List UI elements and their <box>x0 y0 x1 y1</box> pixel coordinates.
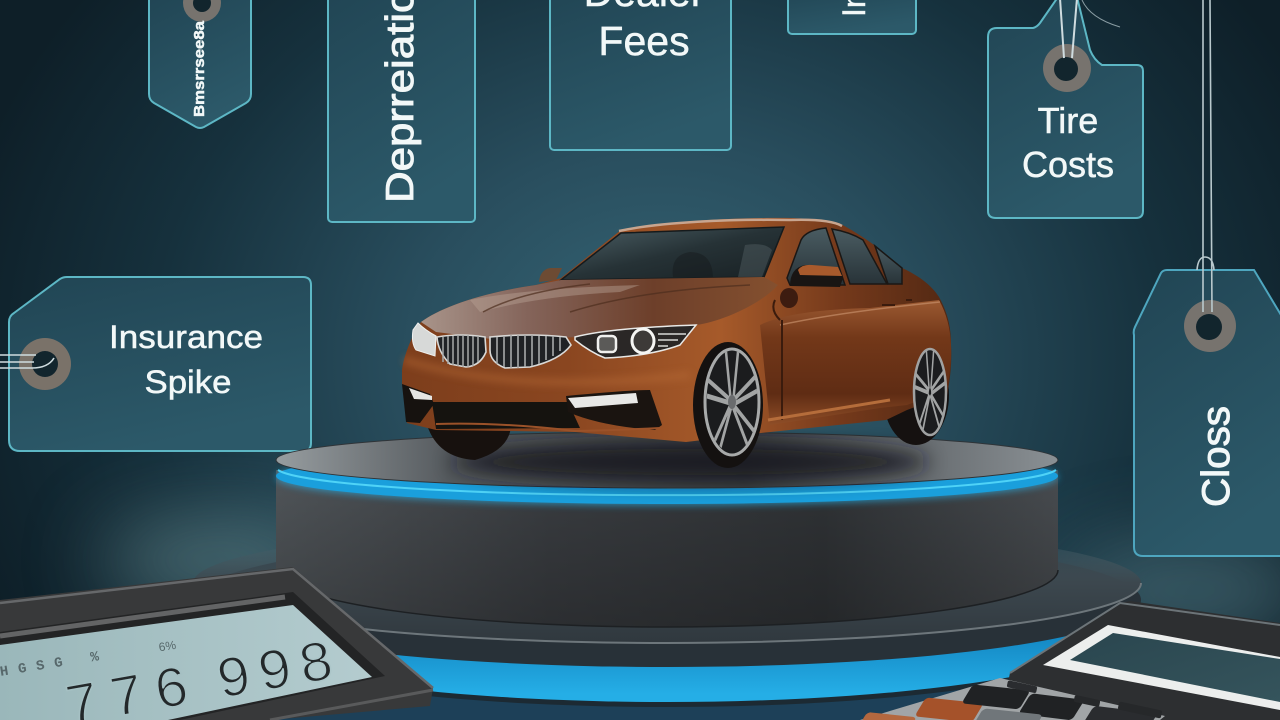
calculator: right keypad <box>856 601 1280 720</box>
upper cylinder <box>276 470 1058 627</box>
near side headlight <box>412 323 436 356</box>
insurance spike label: Insurance <box>109 319 263 355</box>
lcd digits right: 998 <box>212 631 339 716</box>
seats in cabin <box>673 244 772 277</box>
side windows <box>787 228 902 285</box>
bumper accent <box>436 424 660 431</box>
left daytime light <box>409 388 432 400</box>
podium <box>0 432 1280 720</box>
insurance spike label: Spike <box>144 364 232 400</box>
door panels <box>760 300 951 425</box>
bumper highlight <box>404 360 690 382</box>
tag: dealer fees <box>550 0 731 150</box>
calculator keys <box>856 680 1162 720</box>
neon ring <box>276 448 1058 505</box>
front wheel <box>693 342 763 468</box>
tag: closing costs <box>1134 0 1280 556</box>
lcd small mark: 6% <box>158 638 177 654</box>
tag small text: Bmsrrsee8a <box>191 20 208 117</box>
car <box>402 218 951 468</box>
hood panel <box>421 277 778 340</box>
bezel light strip <box>0 597 285 636</box>
lower tier <box>193 523 1141 667</box>
rear tyre <box>883 345 949 445</box>
depreciation label: Deprreiatic <box>379 0 422 203</box>
front grille left <box>437 335 486 367</box>
door handles and seams <box>773 300 912 420</box>
lower sill highlight <box>768 400 890 420</box>
calculator front edge <box>270 690 433 720</box>
lcd small readout: HGSG % <box>0 649 101 681</box>
key plate <box>860 678 1165 720</box>
calculator top lip <box>0 569 433 688</box>
insurance eyelet and string <box>0 338 71 390</box>
tag: partial label <box>788 0 916 34</box>
tire costs label: Tire <box>1038 100 1098 141</box>
display screen <box>1070 633 1280 702</box>
rear wheel rim <box>914 349 946 435</box>
calculator body <box>0 567 433 720</box>
podium top surface <box>276 432 1058 488</box>
tag: depreciation <box>328 0 475 222</box>
windshield <box>561 227 784 280</box>
roof rim <box>619 220 842 231</box>
daytime running light <box>568 393 638 408</box>
left fog housing <box>402 384 434 423</box>
lower bumper intake <box>432 402 580 429</box>
car shadow <box>450 442 930 482</box>
right calculator top bevel <box>1010 603 1280 673</box>
car body shell <box>402 218 951 442</box>
bumper side intake right <box>566 390 662 430</box>
hood gloss <box>470 285 640 312</box>
main headlight <box>575 325 696 358</box>
side mirrors <box>539 265 843 308</box>
display frame <box>1043 625 1280 710</box>
front grille right <box>490 335 571 368</box>
hood creases <box>483 284 750 312</box>
calculator bezel <box>0 592 385 720</box>
background glow near podium <box>100 520 1280 640</box>
right calculator body <box>1000 601 1280 720</box>
tag eyelet <box>183 0 221 22</box>
tire costs label: Costs <box>1022 144 1114 185</box>
far front tyre <box>427 425 511 460</box>
closing tag label: Closs <box>1195 406 1238 507</box>
closing tag eyelet and string <box>1184 0 1236 352</box>
tag: tire costs <box>988 0 1143 218</box>
lcd screen <box>0 605 372 720</box>
podium blue base <box>189 538 1145 707</box>
bottom floor <box>0 690 1280 720</box>
tag: unreadable small label <box>149 0 251 128</box>
tag: insurance spike <box>0 277 311 451</box>
tire tag eyelet and string <box>1043 0 1120 92</box>
shoulder line <box>780 302 940 325</box>
calculator: left LCD <box>0 567 433 720</box>
dealer fees label: Fees <box>598 18 690 64</box>
